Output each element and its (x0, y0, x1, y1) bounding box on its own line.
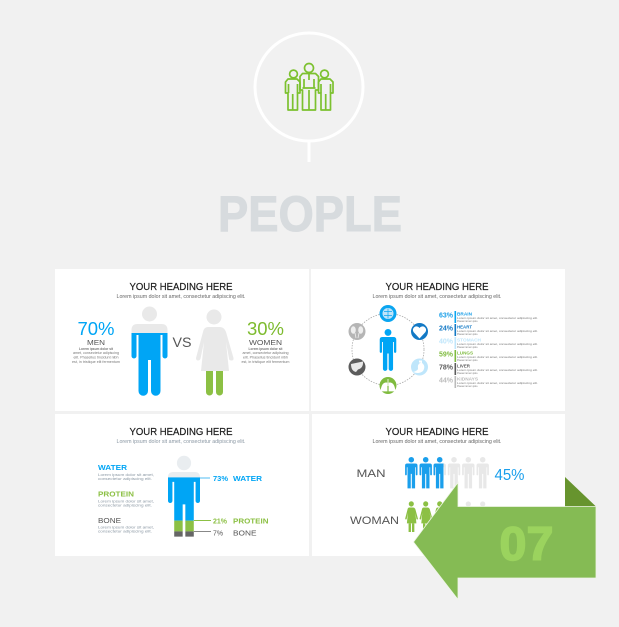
men statistic: 70% (78, 319, 114, 339)
list row: stomach: STOMACH (457, 338, 481, 342)
list row: stomach: Praesent at sem justo. (457, 345, 478, 349)
list row: kidneys: Lorem ipsum dolor sit amet, consectetur adipiscing elit. (457, 381, 538, 385)
heading: YOUR HEADING HERE (130, 427, 233, 438)
callout: water: 73% (213, 476, 229, 483)
list row: stomach (439, 337, 538, 349)
protein description: consectetur adipiscing elit. (98, 502, 152, 508)
bone description: Lorem ipsum dolor sit amet, (98, 524, 154, 530)
woman figure 30 percent (196, 310, 234, 396)
list row: brain: Praesent at sem justo. (457, 319, 478, 323)
bone description (98, 518, 154, 534)
icon: kidneys (348, 323, 366, 340)
ribbon fold (565, 477, 596, 506)
men statistic: Lorem ipsum dolor sit (79, 346, 114, 351)
list row: stomach: Lorem ipsum dolor sit amet, consectetur adipiscing elit. (457, 342, 538, 346)
icon: liver (348, 358, 366, 376)
subheading: Lorem ipsum dolor sit amet, consectetur adipiscing elit. (116, 294, 246, 300)
icon: heart (411, 323, 428, 340)
women statistic: est, in tristique elit fermentum (242, 359, 290, 364)
list row: kidneys: KIDNAYS (457, 376, 478, 382)
heading: YOUR HEADING HERE (386, 282, 489, 293)
list row: kidneys: 44% (439, 378, 454, 384)
callout: protein: PROTEIN (233, 518, 268, 526)
subheading: Lorem ipsum dolor sit amet, consectetur adipiscing elit. (372, 294, 502, 300)
blue man figure (380, 329, 396, 371)
protein description: PROTEIN (98, 492, 134, 498)
man percentage: 45% (494, 467, 524, 484)
list row: brain (439, 311, 538, 323)
man pictogram row (405, 457, 489, 488)
men statistic: MEN (87, 338, 105, 347)
list row: lungs: LUNGS (457, 350, 473, 356)
callout: bone: BONE (233, 530, 257, 538)
list row: kidneys: Praesent at sem justo. (457, 384, 478, 388)
bone description: consectetur adipiscing elit. (98, 528, 152, 534)
arrow (414, 482, 596, 600)
water description: consectetur adipiscing elit. (98, 476, 152, 481)
list row: heart: HEART (457, 324, 472, 330)
icon: brain (380, 305, 396, 322)
men statistic: est, in tristique elit fermentum (72, 359, 121, 364)
subheading: Lorem ipsum dolor sit amet, consectetur adipiscing elit. (372, 439, 502, 445)
list row: brain: Lorem ipsum dolor sit amet, consectetur adipiscing elit. (457, 316, 538, 320)
protein description (98, 492, 154, 508)
women statistic: Lorem ipsum dolor sit (248, 346, 283, 351)
list row: heart: Lorem ipsum dolor sit amet, consectetur adipiscing elit. (457, 329, 538, 333)
list row: heart: Praesent at sem justo. (457, 332, 478, 336)
list row: liver: Praesent at sem justo. (457, 371, 478, 375)
list row: brain: 63% (439, 312, 454, 320)
ribbon arrow badge (414, 477, 596, 600)
title: PEOPLE (218, 186, 402, 242)
list row: lungs: Lorem ipsum dolor sit amet, consectetur adipiscing elit. (457, 355, 538, 359)
callout: bone: 7% (213, 530, 223, 538)
men statistic: amet, consectetur adipiscing (73, 350, 119, 355)
women statistic: WOMEN (249, 338, 282, 347)
men statistic (72, 319, 121, 364)
list row: lungs: Praesent at sem justo. (457, 358, 478, 362)
water description (98, 465, 154, 481)
man figure 70 percent (132, 306, 168, 396)
man label: MAN (356, 468, 386, 480)
callout: protein (194, 518, 268, 526)
icon: stomach (411, 358, 428, 376)
list row: heart: 24% (439, 326, 454, 332)
list row: lungs (439, 350, 538, 362)
callout: bone (194, 530, 257, 538)
protein description: Lorem ipsum dolor sit amet, (98, 498, 154, 504)
callout: protein: 21% (213, 518, 228, 526)
women statistic: elit. Phasellus tincidunt nibh (243, 354, 288, 360)
list row: liver: LIVER (457, 364, 471, 368)
woman pictogram row (405, 501, 485, 532)
callout: water (200, 476, 262, 483)
list row: liver: Lorem ipsum dolor sit amet, consectetur adipiscing elit. (457, 368, 538, 372)
header icon badge (255, 33, 363, 162)
subheading: Lorem ipsum dolor sit amet, consectetur adipiscing elit. (116, 439, 246, 445)
list row: kidneys (439, 376, 538, 388)
panel: body composition (55, 414, 309, 556)
list row: heart (439, 324, 538, 336)
women statistic (242, 319, 290, 364)
panel: men vs women (55, 269, 309, 411)
woman label: WOMAN (350, 515, 399, 527)
infographic canvas (55, 32, 596, 600)
section number: 07 (500, 517, 554, 570)
body figure (168, 456, 200, 537)
dotted ring (352, 314, 424, 386)
callout: water: WATER (233, 476, 262, 483)
list row: stomach: 40% (439, 338, 454, 346)
bone description: BONE (98, 518, 121, 525)
icon: lungs (380, 377, 396, 394)
list row: liver: 78% (439, 364, 454, 372)
panel: organs (311, 269, 565, 411)
list row: liver (439, 363, 538, 375)
panel: man and woman pictograms (312, 414, 565, 556)
men statistic: elit. Phasellus tincidunt nibh (74, 354, 118, 360)
water description: Lorem ipsum dolor sit amet, (98, 472, 154, 477)
heading: YOUR HEADING HERE (386, 427, 489, 438)
women statistic: 30% (247, 319, 284, 339)
icon: group of people (286, 64, 333, 110)
heading: YOUR HEADING HERE (130, 282, 233, 293)
women statistic: amet, consectetur adipiscing (242, 350, 288, 355)
list row: lungs: 59% (439, 352, 454, 358)
vs label: VS (172, 334, 192, 350)
list row: brain: BRAIN (457, 312, 472, 316)
water description: WATER (98, 465, 127, 472)
